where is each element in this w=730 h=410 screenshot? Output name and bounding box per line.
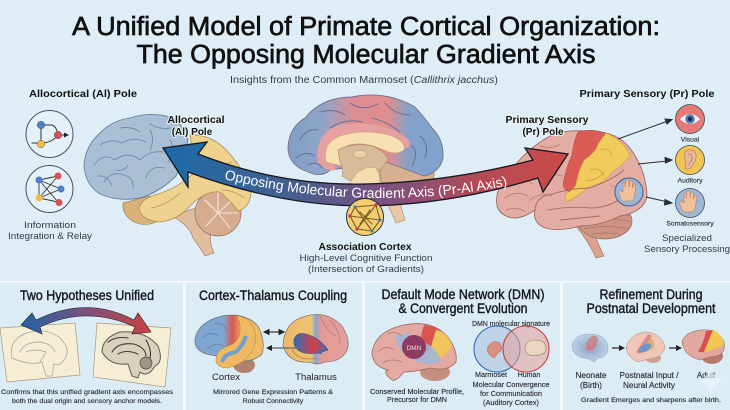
sparkle mark bbox=[699, 367, 723, 395]
label: cortex: Cortex bbox=[212, 372, 240, 383]
text: association cortex bbox=[300, 242, 432, 275]
brain: primary sensory lateral view bbox=[497, 130, 647, 258]
brain: cortex bbox=[195, 315, 263, 373]
callout: primary sensory pole label: Primary Sensory bbox=[506, 115, 589, 126]
icon: integration network bbox=[26, 166, 73, 212]
arrow: opposing molecular gradient axis: Opposing Molecular Gradient Axis (Pr-Al Axis) bbox=[226, 170, 506, 198]
paper: line sketch bbox=[0, 323, 80, 382]
icon: association cortex network bbox=[346, 198, 384, 236]
arrow: reciprocal connection bbox=[264, 330, 284, 334]
brain: central medial view bbox=[288, 95, 443, 223]
label: neonate: Neonate bbox=[576, 371, 607, 380]
brain: neonate bbox=[572, 334, 608, 362]
label: postnatal input: Postnatal Input / bbox=[620, 371, 679, 380]
label: postnatal input: Neural Activity bbox=[623, 381, 675, 390]
caption: information integration bbox=[8, 220, 92, 242]
heading: Default Mode Network (DMN) bbox=[382, 287, 544, 302]
arrow: opposing molecular gradient axis bbox=[162, 141, 569, 206]
label: marmoset: Marmoset bbox=[475, 372, 507, 379]
panel: refinement during postnatal development bbox=[563, 283, 730, 410]
label: human: Human bbox=[518, 372, 540, 379]
callout: primary sensory pole label: (Pr) Pole bbox=[522, 127, 564, 138]
caption: information integration: Integration & Relay bbox=[8, 231, 92, 242]
arrow bbox=[612, 345, 625, 351]
arrow: double headed gradient bbox=[21, 308, 151, 334]
label: postnatal input bbox=[620, 371, 679, 390]
caption: Robust Connectivity bbox=[243, 398, 304, 405]
callout: primary sensory pole label bbox=[506, 115, 589, 138]
title: The Opposing Molecular Gradient Axis bbox=[136, 41, 596, 69]
icon: hand on brain bbox=[615, 178, 643, 206]
text: association cortex: High-Level Cognitive Function bbox=[300, 253, 432, 264]
caption: Precursor for DMN bbox=[387, 397, 447, 404]
caption bbox=[370, 389, 464, 404]
brain: DMN highlight: DMN bbox=[407, 345, 422, 352]
paper: shaded sketch bbox=[93, 323, 171, 387]
caption: information integration: Information bbox=[24, 220, 76, 231]
caption: convergence: for Communication bbox=[480, 389, 542, 398]
brain: allocortical lateral view bbox=[84, 114, 251, 256]
heading: primary sensory pole: Primary Sensory (Pr) Pole bbox=[580, 88, 715, 100]
caption: specialized sensory processing: Specialized bbox=[662, 233, 712, 244]
panel: default mode network bbox=[365, 283, 560, 410]
text: association cortex: (Intersection of Gradients) bbox=[308, 264, 424, 275]
heading: allocortical pole: Allocortical (Al) Pole bbox=[29, 88, 137, 100]
caption bbox=[1, 389, 174, 405]
callout: allocortical pole label bbox=[168, 115, 225, 138]
icon: relay circuit bbox=[26, 110, 73, 158]
heading: Refinement During bbox=[600, 287, 702, 302]
arrow bbox=[669, 345, 682, 351]
panel divider band bbox=[0, 281, 730, 410]
heading bbox=[382, 287, 544, 316]
icon: somatosensory bbox=[666, 188, 714, 228]
caption: Mirrored Gene Expression Patterns & bbox=[213, 389, 333, 396]
label: thalamus: Thalamus bbox=[295, 372, 337, 383]
label: DMN signature: DMN molecular signature bbox=[472, 321, 550, 328]
caption bbox=[213, 389, 333, 405]
icon: visual: Visual bbox=[681, 136, 700, 144]
caption: convergence: (Auditory Cortex) bbox=[483, 398, 539, 407]
label: adult: Adult bbox=[697, 371, 716, 380]
caption: specialized sensory processing: Sensory Processing bbox=[644, 244, 730, 255]
label: neonate: (Birth) bbox=[580, 381, 602, 390]
brain: thalamus bbox=[283, 314, 348, 364]
heading: Cortex-Thalamus Coupling bbox=[199, 288, 347, 303]
caption: convergence: Molecular Convergence bbox=[472, 380, 550, 389]
brain: adult bbox=[682, 330, 724, 364]
caption: both the dual origin and sensory anchor models. bbox=[12, 398, 162, 405]
arrows: to sensory icons bbox=[618, 119, 672, 205]
text: association cortex: Association Cortex bbox=[318, 242, 412, 253]
callout: allocortical pole label: (Al) Pole bbox=[172, 127, 213, 138]
icon: auditory bbox=[676, 146, 704, 184]
caption: specialized sensory processing bbox=[644, 233, 730, 255]
icon: auditory: Auditory bbox=[678, 178, 703, 184]
heading: Two Hypotheses Unified bbox=[20, 288, 154, 303]
arrow: thalamus to cortex bbox=[266, 345, 298, 351]
brain: DMN highlight bbox=[372, 324, 456, 381]
label: neonate bbox=[576, 371, 607, 390]
caption: Gradient Emerges and sharpens after birth. bbox=[581, 397, 721, 404]
callout: allocortical pole label: Allocortical bbox=[168, 115, 225, 126]
subtitle: Insights from the Common Marmoset ( Callithrix jacchus ) bbox=[230, 75, 498, 86]
chart: venn diagram bbox=[474, 326, 549, 372]
title: A Unified Model of Primate Cortical Organization: bbox=[72, 13, 660, 41]
title bbox=[72, 13, 660, 69]
panel: cortex-thalamus coupling bbox=[186, 283, 362, 410]
heading: & Convergent Evolution bbox=[398, 301, 528, 316]
caption: Confirms that this unified gradient axis encompasses bbox=[1, 389, 174, 396]
brain: postnatal bbox=[626, 332, 665, 363]
heading bbox=[586, 287, 716, 316]
icon: visual bbox=[676, 104, 704, 144]
panel: two hypotheses unified bbox=[0, 283, 183, 410]
caption: convergence bbox=[472, 380, 550, 407]
icon: somatosensory: Somatosensory bbox=[666, 220, 714, 228]
caption: Conserved Molecular Profile, bbox=[370, 389, 464, 396]
heading: Postnatal Development bbox=[586, 301, 716, 316]
